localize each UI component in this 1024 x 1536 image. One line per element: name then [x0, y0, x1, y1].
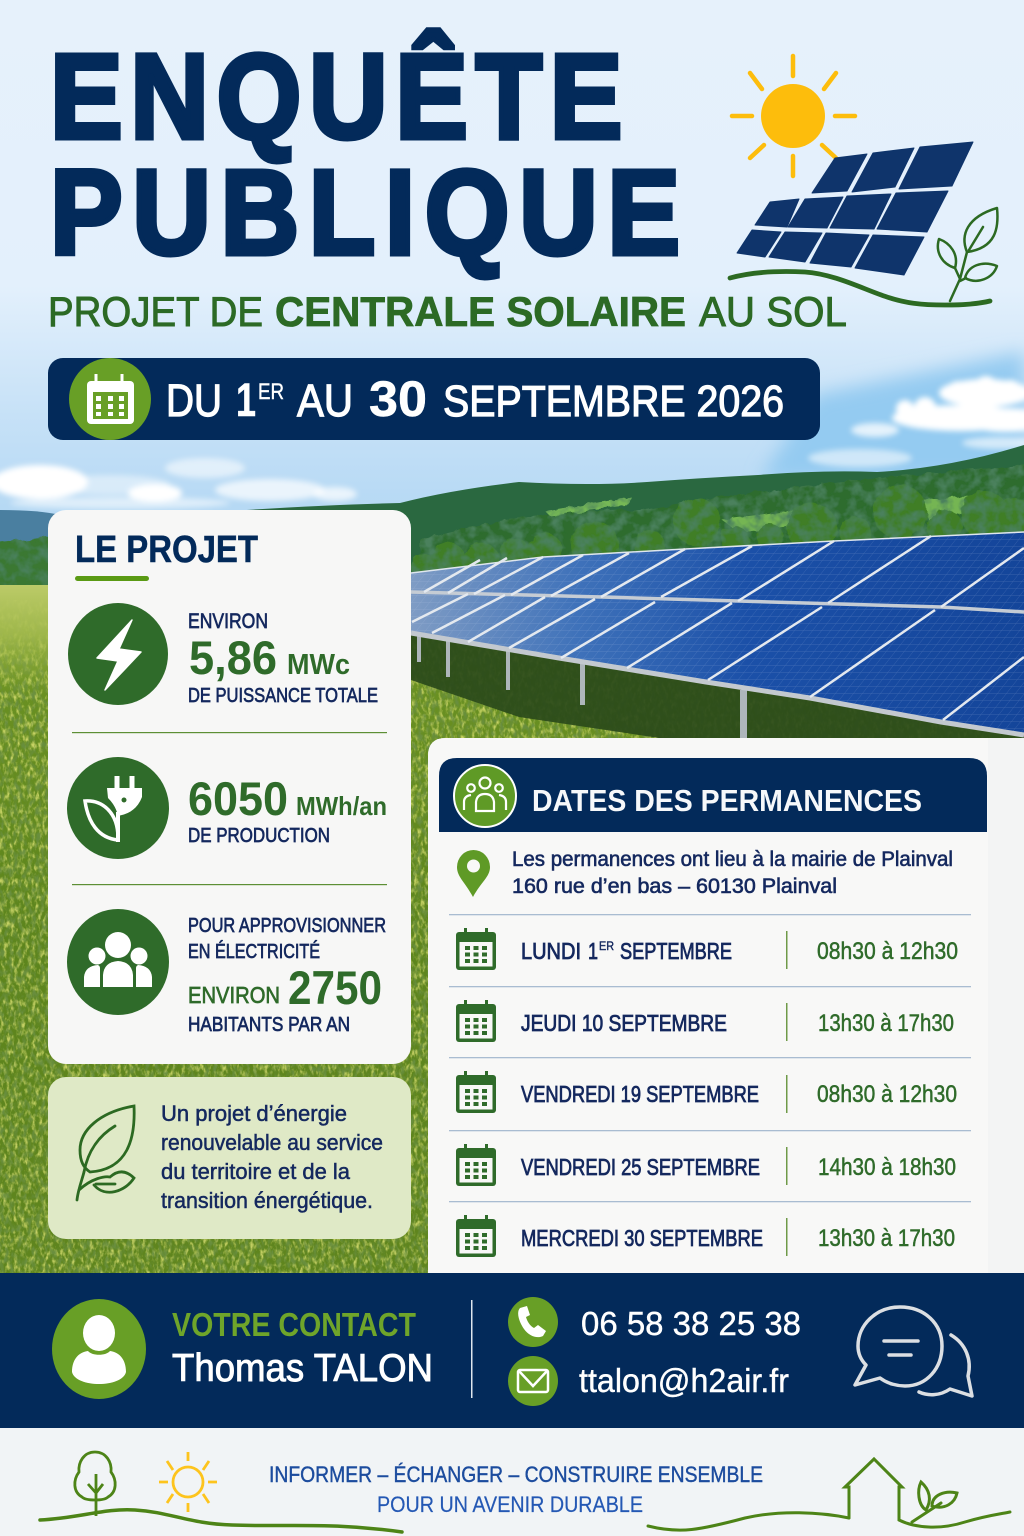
background: meadow: [0, 585, 1024, 1275]
row: lundi 1er septembre: SEPTEMBRE: [620, 938, 732, 964]
message text: [161, 1101, 383, 1213]
panel: le projet: [48, 510, 411, 1064]
address text: 160 rue d’en bas – 60130 Plainval: [512, 875, 837, 898]
icon: email: [508, 1356, 558, 1406]
icon: house and wave: [648, 1459, 1010, 1530]
email address: ttalon@h2air.fr: [579, 1362, 789, 1399]
row: vendredi 19 septembre: [456, 1071, 957, 1113]
date text: ER: [258, 379, 284, 404]
icon: location pin: [457, 850, 490, 897]
row: jeudi 10 septembre: 13h30 à 17h30: [818, 1010, 954, 1037]
footer slogan: POUR UN AVENIR DURABLE: [377, 1492, 643, 1517]
date text: DU: [166, 375, 222, 426]
address text: [512, 848, 953, 898]
subtitle: PROJET DE: [48, 288, 263, 335]
date text: AU: [297, 375, 353, 426]
panel: dates des permanences: [428, 738, 988, 1273]
icon: tree: [75, 1452, 115, 1516]
row: mercredi 30 septembre: [456, 1215, 955, 1257]
background: sky: [0, 0, 1024, 520]
date text: SEPTEMBRE 2026: [443, 377, 784, 426]
background: blue sky patch: [760, 352, 1024, 480]
icon: phone: [508, 1297, 558, 1347]
header band: [439, 758, 987, 832]
icon: sun: [732, 56, 855, 176]
stat: production: MWh/an: [296, 791, 387, 821]
contact band: [0, 1273, 1024, 1428]
row: lundi 1er septembre: LUNDI: [521, 938, 581, 964]
icon: green swoosh and plant: [730, 208, 997, 305]
row: vendredi 19 septembre: VENDREDI 19 SEPTEMBRE: [521, 1081, 759, 1107]
footer slogan: INFORMER – ÉCHANGER – CONSTRUIRE ENSEMBLE: [269, 1462, 763, 1487]
stat: habitants: 2750: [288, 961, 382, 1014]
contact name: VOTRE CONTACT: [172, 1306, 416, 1343]
stat: habitants: EN ÉLECTRICITÉ: [188, 940, 320, 963]
message text: du territoire et de la: [161, 1159, 351, 1184]
icon: contact person: [52, 1299, 146, 1399]
left wave: [40, 1510, 402, 1532]
row: lundi 1er septembre: [456, 928, 958, 970]
background: solar panel array: [411, 532, 1024, 740]
date banner: [48, 358, 820, 440]
stat: habitants: [67, 909, 386, 1036]
phone number: 06 58 38 25 38: [581, 1305, 801, 1342]
icon: outline sun: [159, 1452, 217, 1512]
row: lundi 1er septembre: 1: [588, 938, 598, 964]
row: jeudi 10 septembre: JEUDI 10 SEPTEMBRE: [521, 1010, 727, 1036]
stat: habitants: POUR APPROVISIONNER: [188, 915, 386, 937]
icon: speech bubbles: [855, 1307, 972, 1396]
panel posts: [417, 636, 747, 740]
stat: habitants: HABITANTS PAR AN: [188, 1014, 350, 1036]
icon: people on green disc: [454, 765, 516, 827]
row: mercredi 30 septembre: MERCREDI 30 SEPTEMBRE: [521, 1225, 763, 1251]
row: vendredi 25 septembre: 14h30 à 18h30: [818, 1154, 956, 1181]
icon: calendar on green disc: [69, 358, 151, 440]
stat: production: 6050: [188, 772, 288, 825]
stat: production: DE PRODUCTION: [188, 825, 330, 847]
icon: leaves: [77, 1106, 134, 1200]
stat: puissance: DE PUISSANCE TOTALE: [188, 685, 378, 707]
stat: puissance: ENVIRON: [188, 610, 268, 633]
subtitle: AU SOL: [699, 288, 847, 335]
subtitle: [48, 288, 847, 335]
row: vendredi 19 septembre: 08h30 à 12h30: [817, 1081, 957, 1108]
date text: [166, 371, 784, 427]
title: PUBLIQUE: [50, 146, 680, 280]
title: [50, 30, 680, 280]
row: vendredi 25 septembre: VENDREDI 25 SEPTEMBRE: [521, 1154, 760, 1180]
contact band: Thomas TALON: [172, 1347, 433, 1390]
row: vendredi 25 septembre: [456, 1144, 956, 1186]
row: lundi 1er septembre: 08h30 à 12h30: [817, 938, 958, 965]
row: jeudi 10 septembre: [456, 1000, 954, 1042]
heading: le projet: LE PROJET: [75, 529, 258, 571]
header title: DATES DES PERMANENCES: [532, 783, 922, 818]
background: clouds: [0, 376, 1024, 509]
stat: production: [67, 757, 387, 859]
stat: habitants: ENVIRON: [188, 982, 280, 1008]
stat: puissance: 5,86: [189, 631, 277, 684]
background: hills: [0, 445, 1024, 600]
row: lundi 1er septembre: ER: [599, 939, 614, 953]
row: mercredi 30 septembre: 13h30 à 17h30: [818, 1225, 955, 1252]
subtitle: CENTRALE SOLAIRE: [275, 288, 686, 335]
panel: transition message: [48, 1077, 411, 1239]
stat: puissance: MWc: [287, 649, 350, 681]
footer slogan: [269, 1462, 763, 1517]
title: ENQUÊTE: [50, 30, 622, 164]
date text: 30: [369, 371, 427, 427]
heading underline: [75, 576, 149, 581]
right background strip: [428, 738, 1024, 1273]
message text: transition énergétique.: [161, 1188, 373, 1213]
address text: Les permanences ont lieu à la mairie de Plainval: [512, 848, 953, 871]
footer strip: [0, 1428, 1024, 1536]
message text: renouvelable au service: [161, 1130, 383, 1155]
message text: Un projet d’énergie: [161, 1101, 347, 1126]
date text: 1: [236, 373, 256, 426]
icon: solar panel: [737, 142, 973, 275]
stat: puissance: [68, 603, 378, 707]
